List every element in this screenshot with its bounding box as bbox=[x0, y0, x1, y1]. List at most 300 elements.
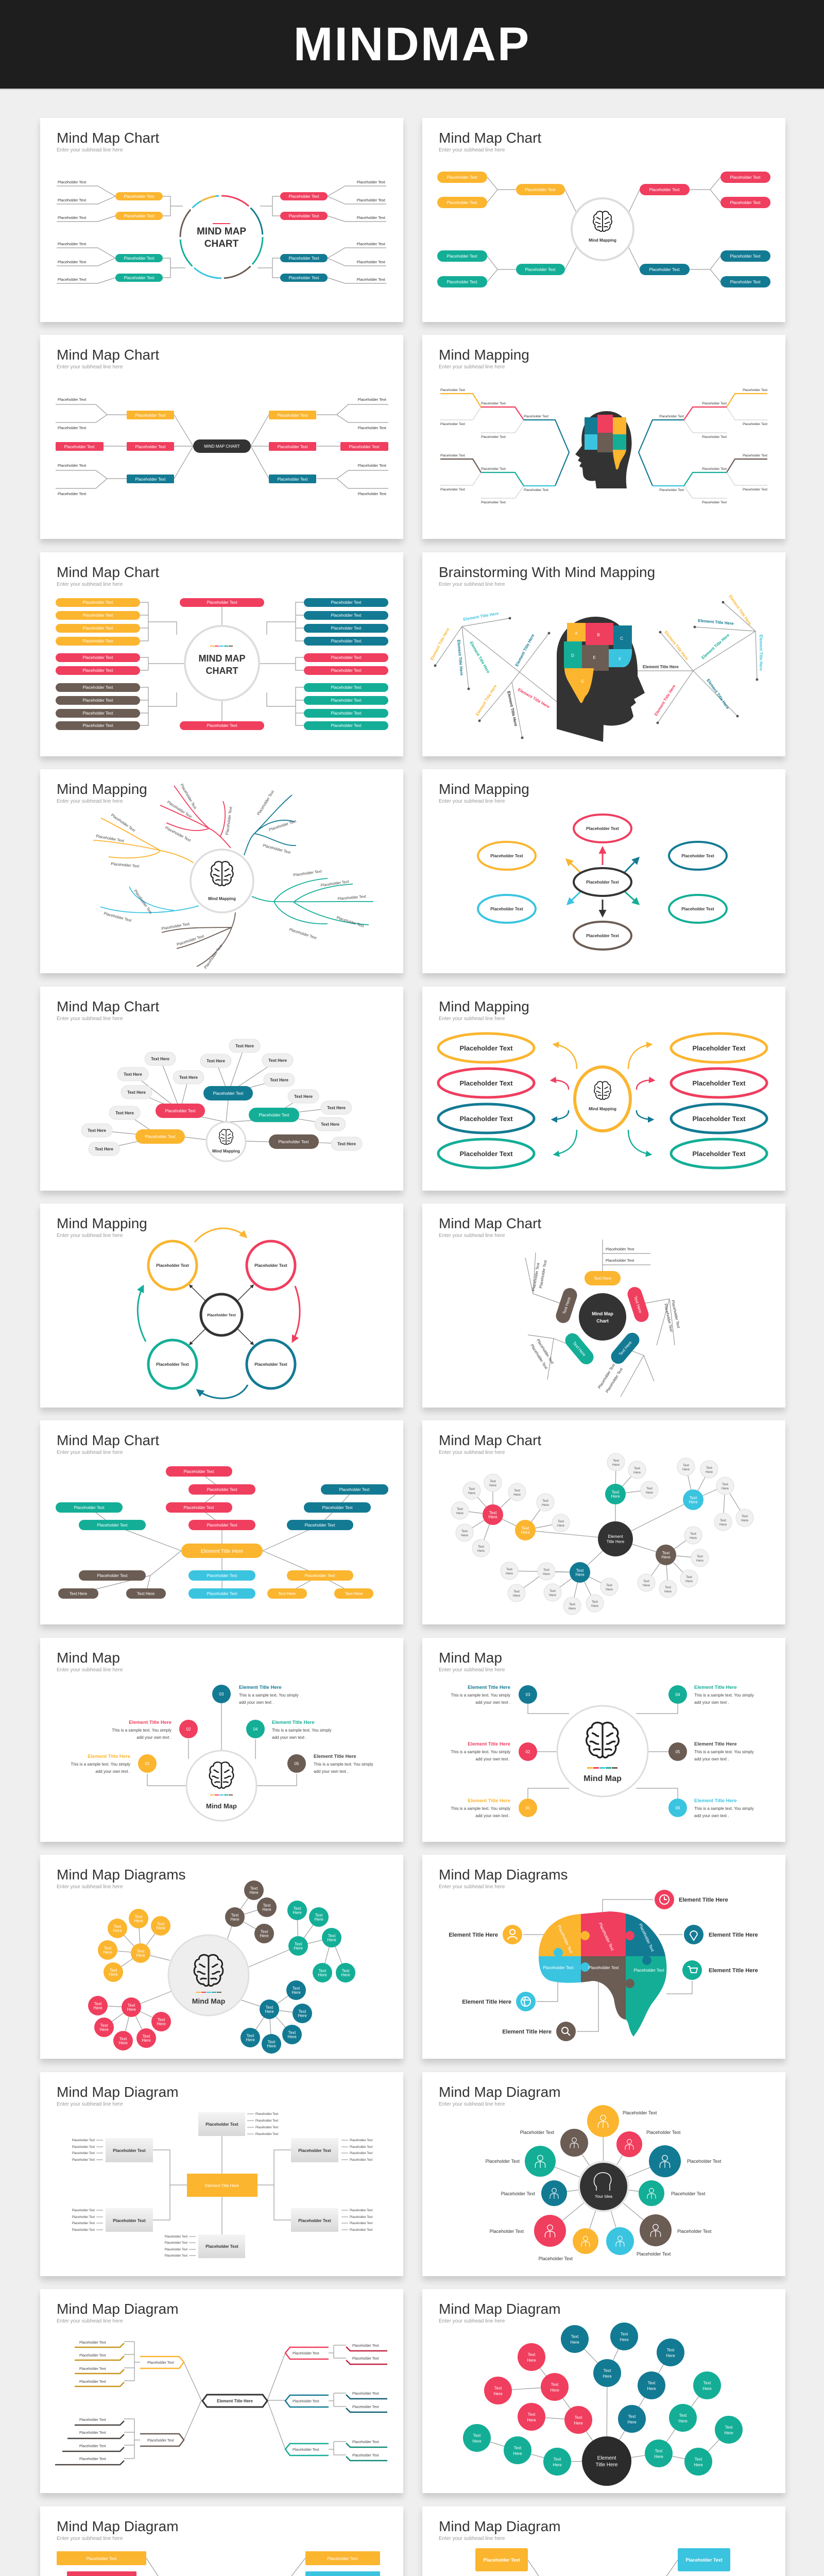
panel: slide 8 mind mapping brush ellipses: Placeholder Text bbox=[490, 854, 523, 858]
panel: slide 6 brainstorming with mind mapping: Element Title Here bbox=[728, 594, 752, 626]
panel: slide 15 mind map five numbered: add your own text . bbox=[239, 1700, 274, 1705]
panel: slide 19 mind map diagram boxes: Placeholder Text bbox=[255, 2113, 279, 2116]
panel: slide 7 mind mapping organic branches: Mind Mapping bbox=[208, 896, 236, 901]
panel: slide 17 mind map diagrams clusters: Here bbox=[260, 1934, 269, 1938]
panel: slide 12 mind map chart rotated pills: Mind Map bbox=[592, 1311, 613, 1316]
panel: slide 5 mind map chart many pills: Placeholder Text bbox=[331, 600, 362, 605]
panel: slide 16 mind map six numbered: 02 bbox=[526, 1750, 530, 1754]
panel: slide 14 mind map chart network: Here bbox=[633, 1471, 641, 1475]
panel: slide 11 mind mapping cycle: Placeholder Text bbox=[207, 1314, 236, 1317]
panel: slide 2 mind map chart brain pills: Placeholder Text bbox=[730, 175, 761, 180]
panel: slide 14 mind map chart network: Here bbox=[549, 1594, 556, 1597]
panel: slide 13 mind map chart hierarchy: Placeholder Text bbox=[207, 1523, 237, 1528]
panel: slide 14 mind map chart network: Here bbox=[682, 1468, 690, 1471]
panel: slide 22 mind map diagram tree circles: Text bbox=[648, 2381, 656, 2385]
panel: slide 22 mind map diagram tree circles: Here bbox=[666, 2353, 675, 2358]
panel: slide 17 mind map diagrams clusters: Text bbox=[299, 2009, 306, 2014]
panel: slide 17 mind map diagrams clusters: Text bbox=[250, 1886, 258, 1891]
panel: slide 16 mind map six numbered: Enter your subhead line here bbox=[439, 1667, 505, 1673]
panel: slide 17 mind map diagrams clusters: Text bbox=[119, 2037, 127, 2041]
panel: slide 21 mind map diagram hexagons: Placeholder Text bbox=[352, 2344, 379, 2348]
panel: slide 16 mind map six numbered: add your own text . bbox=[475, 1814, 510, 1818]
panel: slide 13 mind map chart hierarchy: Enter your subhead line here bbox=[57, 1450, 123, 1455]
panel: slide 15 mind map five numbered: Element Title Here bbox=[88, 1754, 130, 1759]
panel: slide 17 mind map diagrams clusters: Text bbox=[94, 2002, 102, 2006]
panel: slide 13 mind map chart hierarchy: Placeholder Text bbox=[339, 1487, 370, 1492]
panel: slide 16 mind map six numbered: This is a sample text. You simply bbox=[451, 1693, 510, 1698]
panel: slide 7 mind mapping organic branches: Placeholder Text bbox=[337, 894, 367, 901]
panel: slide 22 mind map diagram tree circles: Here bbox=[570, 2340, 579, 2345]
panel: slide 22 mind map diagram tree circles bbox=[422, 2289, 785, 2493]
panel: slide 22 mind map diagram tree circles: Text bbox=[554, 2457, 561, 2462]
panel: slide 22 mind map diagram tree circles: Here bbox=[472, 2439, 482, 2444]
panel: slide 17 mind map diagrams clusters: Text bbox=[288, 2030, 296, 2035]
panel: slide 12 mind map chart rotated pills: Chart bbox=[596, 1318, 609, 1324]
panel: slide 14 mind map chart network: Text bbox=[461, 1530, 468, 1533]
panel: slide 12 mind map chart rotated pills: Text Here bbox=[594, 1276, 612, 1281]
panel: slide 20 mind map diagram people: Enter your subhead line here bbox=[439, 2102, 505, 2107]
panel: slide 14 mind map chart network: Here bbox=[611, 1494, 620, 1499]
panel: slide 17 mind map diagrams clusters: Here bbox=[291, 1990, 301, 1995]
title: MINDMAP bbox=[294, 18, 530, 71]
panel: slide 19 mind map diagram boxes: Placeholder Text bbox=[72, 2152, 95, 2155]
panel: slide 17 mind map diagrams clusters: Text bbox=[247, 2033, 254, 2038]
panel: slide 15 mind map five numbered: Enter your subhead line here bbox=[57, 1667, 123, 1673]
panel: slide 4 mind mapping head: Placeholder Text bbox=[524, 415, 548, 418]
icon: head with puzzle brain: D bbox=[571, 653, 574, 658]
panel: slide 16 mind map six numbered: 06 bbox=[676, 1806, 680, 1810]
panel: slide 16 mind map six numbered: add your own text . bbox=[475, 1757, 510, 1761]
panel: slide 14 mind map chart network bbox=[422, 1420, 785, 1624]
panel: slide 21 mind map diagram hexagons: Placeholder Text bbox=[79, 2418, 106, 2422]
panel: slide 17 mind map diagrams clusters: Text bbox=[294, 1906, 301, 1911]
panel: slide 12 mind map chart rotated pills: Enter your subhead line here bbox=[439, 1233, 505, 1239]
panel: slide 15 mind map five numbered: 01 bbox=[145, 1761, 150, 1766]
panel: slide 14 mind map chart network: Text bbox=[706, 1466, 712, 1470]
panel: slide 3 mind map chart dark pill: Placeholder Text bbox=[358, 463, 387, 468]
panel: slide 5 mind map chart many pills: Placeholder Text bbox=[331, 639, 362, 643]
panel: slide 1 mind map chart circle: Placeholder Text bbox=[58, 215, 87, 220]
panel: slide 2 mind map chart brain pills: Placeholder Text bbox=[649, 188, 680, 192]
panel: slide 17 mind map diagrams clusters: Text bbox=[110, 1968, 117, 1973]
panel: slide 10 mind mapping yellow center: Enter your subhead line here bbox=[439, 1016, 505, 1022]
panel: slide 19 mind map diagram boxes: Placeholder Text bbox=[72, 2209, 95, 2212]
panel: slide 13 mind map chart hierarchy: Placeholder Text bbox=[207, 1591, 237, 1596]
panel: slide 9 mind map chart tree: Text Here bbox=[327, 1106, 346, 1110]
panel: slide 20 mind map diagram people: Placeholder Text bbox=[646, 2130, 681, 2135]
panel: slide 1 mind map chart circle: Placeholder Text bbox=[288, 276, 319, 280]
panel: slide 10 mind mapping yellow center: Mind Mapping bbox=[439, 998, 529, 1014]
panel: slide 19 mind map diagram boxes: Element Title Here bbox=[205, 2183, 239, 2188]
panel: slide 17 mind map diagrams clusters: Here bbox=[134, 1919, 143, 1923]
panel: slide 15 mind map five numbered: add your own text . bbox=[314, 1769, 349, 1774]
panel: slide 17 mind map diagrams clusters: Here bbox=[99, 2027, 109, 2032]
panel: slide 14 mind map chart network: Here bbox=[477, 1549, 485, 1553]
panel: slide 6 brainstorming with mind mapping: Element Title Here bbox=[517, 687, 551, 709]
panel: slide 11 mind mapping cycle: Placeholder Text bbox=[254, 1263, 287, 1268]
panel: slide 11 mind mapping cycle: Mind Mapping bbox=[57, 1215, 147, 1231]
panel: slide 13 mind map chart hierarchy: Text Here bbox=[278, 1591, 296, 1596]
panel: slide 17 mind map diagrams clusters: Text bbox=[158, 2018, 165, 2022]
panel: slide 8 mind mapping brush ellipses: Placeholder Text bbox=[490, 907, 523, 911]
panel: slide 19 mind map diagram boxes: Placeholder Text bbox=[72, 2159, 95, 2162]
panel: slide 12 mind map chart rotated pills: Mind Map Chart bbox=[439, 1215, 541, 1231]
panel: slide 17 mind map diagrams clusters: Here bbox=[118, 2041, 128, 2045]
panel: slide 8 mind mapping brush ellipses: Placeholder Text bbox=[586, 880, 619, 885]
panel: slide 12 mind map chart rotated pills: Text Here bbox=[618, 1340, 633, 1357]
panel: slide 1 mind map chart circle: Placeholder Text bbox=[288, 194, 319, 199]
panel: slide 19 mind map diagram boxes: Placeholder Text bbox=[113, 2218, 146, 2223]
panel: slide 13 mind map chart hierarchy: Placeholder Text bbox=[74, 1505, 105, 1510]
panel: slide 14 mind map chart network: Text bbox=[720, 1519, 726, 1522]
panel: slide 9 mind map chart tree: Text Here bbox=[321, 1122, 339, 1127]
panel: slide 17 mind map diagrams clusters: Text bbox=[157, 1922, 165, 1926]
panel: slide 6 brainstorming with mind mapping: Element Title Here bbox=[759, 635, 763, 671]
panel: slide 4 mind mapping head: Placeholder Text bbox=[481, 435, 506, 439]
panel: slide 9 mind map chart tree: Text Here bbox=[179, 1075, 198, 1080]
panel: slide 24 mind map diagram square boxes: Placeholder Text bbox=[685, 2557, 723, 2563]
panel: slide 18 mind map diagrams puzzle brain: Placeholder Text bbox=[598, 1922, 615, 1952]
panel: slide 1 mind map chart circle: Mind Map Chart bbox=[57, 130, 159, 146]
panel: slide 14 mind map chart network: Text bbox=[550, 1589, 556, 1593]
panel: slide 13 mind map chart hierarchy: Text Here bbox=[70, 1591, 88, 1596]
panel: slide 19 mind map diagram boxes: Placeholder Text bbox=[255, 2126, 279, 2129]
panel: slide 22 mind map diagram tree circles: Here bbox=[620, 2337, 629, 2342]
panel: slide 14 mind map chart network: Text bbox=[634, 1467, 640, 1470]
panel: slide 19 mind map diagram boxes: Placeholder Text bbox=[72, 2222, 95, 2225]
panel: slide 6 brainstorming with mind mapping: Element Title Here bbox=[430, 627, 451, 661]
panel: slide 9 mind map chart tree: Text Here bbox=[95, 1147, 113, 1151]
panel: slide 18 mind map diagrams puzzle brain: Placeholder Text bbox=[638, 1923, 655, 1953]
panel: slide 14 mind map chart network: Here bbox=[543, 1572, 550, 1576]
panel: slide 15 mind map five numbered bbox=[40, 1638, 403, 1842]
panel: slide 23 mind map diagram colored boxes: Enter your subhead line here bbox=[57, 2536, 123, 2541]
panel: slide 12 mind map chart rotated pills: Text Here bbox=[633, 1295, 643, 1314]
panel: slide 22 mind map diagram tree circles: Text bbox=[571, 2334, 579, 2339]
panel: slide 17 mind map diagrams clusters: Text bbox=[263, 1903, 271, 1908]
panel: slide 17 mind map diagrams clusters: Text bbox=[266, 2005, 273, 2010]
panel: slide 14 mind map chart network: Text bbox=[478, 1545, 484, 1549]
panel: slide 7 mind mapping organic branches: Placeholder Text bbox=[110, 812, 136, 833]
panel: slide 17 mind map diagrams clusters: Text bbox=[104, 1946, 112, 1951]
icon: head with puzzle brain: G bbox=[581, 679, 584, 684]
panel: slide 17 mind map diagrams clusters: Here bbox=[142, 2038, 151, 2043]
panel: slide 1 mind map chart circle: Placeholder Text bbox=[357, 242, 386, 246]
panel: slide 10 mind mapping yellow center: Placeholder Text bbox=[692, 1079, 746, 1087]
panel: slide 2 mind map chart brain pills: Placeholder Text bbox=[525, 188, 556, 192]
panel: slide 16 mind map six numbered: This is a sample text. You simply bbox=[694, 1806, 754, 1811]
panel: slide 2 mind map chart brain pills: Enter your subhead line here bbox=[439, 147, 505, 153]
panel: slide 14 mind map chart network: Here bbox=[591, 1604, 598, 1608]
panel: slide 3 mind map chart dark pill: Placeholder Text bbox=[277, 413, 308, 418]
panel: slide 17 mind map diagrams clusters: Text bbox=[143, 2034, 150, 2039]
panel: slide 3 mind map chart dark pill: Placeholder Text bbox=[135, 477, 166, 482]
panel: slide 13 mind map chart hierarchy: Text Here bbox=[345, 1591, 363, 1596]
panel: slide 19 mind map diagram boxes: Placeholder Text bbox=[165, 2235, 187, 2239]
panel: slide 15 mind map five numbered: This is a sample text. You simply bbox=[112, 1728, 171, 1733]
panel: slide 22 mind map diagram tree circles: Text bbox=[551, 2382, 559, 2387]
panel: slide 7 mind mapping organic branches: Placeholder Text bbox=[203, 943, 224, 970]
panel: slide 15 mind map five numbered: 02 bbox=[186, 1727, 191, 1732]
panel: slide 19 mind map diagram boxes: Enter your subhead line here bbox=[57, 2102, 123, 2107]
panel: slide 6 brainstorming with mind mapping: Element Title Here bbox=[514, 633, 536, 667]
panel: slide 5 mind map chart many pills: Mind Map Chart bbox=[57, 564, 159, 580]
panel: slide 3 mind map chart dark pill: Placeholder Text bbox=[58, 492, 87, 496]
panel: slide 10 mind mapping yellow center: Placeholder Text bbox=[459, 1115, 513, 1123]
panel: slide 21 mind map diagram hexagons: Placeholder Text bbox=[79, 2445, 106, 2448]
panel: slide 15 mind map five numbered: 03 bbox=[219, 1692, 224, 1697]
panel: slide 7 mind mapping organic branches: Placeholder Text bbox=[268, 819, 297, 832]
panel: slide 19 mind map diagram boxes: Placeholder Text bbox=[350, 2152, 373, 2155]
panel: slide 8 mind mapping brush ellipses: Enter your subhead line here bbox=[439, 799, 505, 804]
panel: slide 6 brainstorming with mind mapping: Brainstorming With Mind Mapping bbox=[439, 564, 655, 580]
panel: slide 14 mind map chart network: Here bbox=[513, 1493, 521, 1497]
panel: slide 21 mind map diagram hexagons bbox=[40, 2289, 403, 2493]
panel: slide 13 mind map chart hierarchy: Placeholder Text bbox=[305, 1523, 335, 1528]
panel: slide 5 mind map chart many pills: Placeholder Text bbox=[82, 655, 113, 660]
panel: slide 12 mind map chart rotated pills: Placeholder Text bbox=[605, 1367, 624, 1394]
panel: slide 21 mind map diagram hexagons: Placeholder Text bbox=[352, 2405, 379, 2409]
panel: slide 21 mind map diagram hexagons: Placeholder Text bbox=[293, 2400, 319, 2403]
panel: slide 5 mind map chart many pills: Placeholder Text bbox=[82, 626, 113, 631]
panel: slide 1 mind map chart circle: Placeholder Text bbox=[124, 256, 154, 261]
panel: slide 14 mind map chart network: Here bbox=[661, 1555, 671, 1560]
panel: slide 2 mind map chart brain pills: Placeholder Text bbox=[447, 200, 477, 205]
panel: slide 5 mind map chart many pills bbox=[40, 552, 403, 756]
panel: slide 21 mind map diagram hexagons: Placeholder Text bbox=[79, 2341, 106, 2345]
panel: slide 14 mind map chart network: Here bbox=[685, 1580, 693, 1583]
panel: slide 14 mind map chart network: Here bbox=[643, 1584, 650, 1587]
panel: slide 4 mind mapping head: Placeholder Text bbox=[702, 402, 727, 405]
panel: slide 14 mind map chart network: Text bbox=[522, 1526, 529, 1531]
panel: slide 14 mind map chart network: Text bbox=[683, 1464, 689, 1467]
panel: slide 19 mind map diagram boxes: Placeholder Text bbox=[255, 2120, 279, 2123]
panel: slide 14 mind map chart network: Here bbox=[606, 1588, 613, 1591]
panel: slide 14 mind map chart network: Here bbox=[719, 1523, 727, 1527]
panel: slide 1 mind map chart circle: Placeholder Text bbox=[58, 198, 87, 202]
panel: slide 21 mind map diagram hexagons: Enter your subhead line here bbox=[57, 2318, 123, 2324]
panel: slide 19 mind map diagram boxes: Placeholder Text bbox=[298, 2218, 331, 2223]
panel: slide 18 mind map diagrams puzzle brain: Element Title Here bbox=[462, 1999, 511, 2005]
panel: slide 14 mind map chart network: Element bbox=[608, 1534, 623, 1539]
panel: slide 4 mind mapping head: Placeholder Text bbox=[702, 467, 727, 471]
panel: slide 19 mind map diagram boxes: Placeholder Text bbox=[165, 2248, 187, 2251]
panel: slide 4 mind mapping head: Placeholder Text bbox=[440, 454, 465, 457]
panel: slide 10 mind mapping yellow center bbox=[422, 987, 785, 1191]
panel: slide 4 mind mapping head: Placeholder Text bbox=[481, 501, 506, 504]
panel: slide 17 mind map diagrams clusters: Text bbox=[261, 1929, 268, 1934]
icon: head with puzzle brain: B bbox=[597, 633, 600, 637]
panel: slide 13 mind map chart hierarchy: Placeholder Text bbox=[322, 1505, 353, 1510]
panel: slide 14 mind map chart network: Text bbox=[514, 1489, 520, 1493]
panel: slide 22 mind map diagram tree circles: Here bbox=[513, 2451, 522, 2456]
panel: slide 22 mind map diagram tree circles: Here bbox=[678, 2419, 688, 2424]
panel: slide 21 mind map diagram hexagons: Placeholder Text bbox=[293, 2352, 319, 2355]
panel: slide 21 mind map diagram hexagons: Placeholder Text bbox=[79, 2367, 106, 2371]
panel: slide 7 mind mapping organic branches: Placeholder Text bbox=[256, 789, 275, 816]
panel: slide 14 mind map chart network: Enter your subhead line here bbox=[439, 1450, 505, 1455]
panel: slide 7 mind mapping organic branches: Placeholder Text bbox=[111, 861, 140, 869]
panel: slide 14 mind map chart network: Text bbox=[606, 1584, 612, 1587]
panel: slide 17 mind map diagrams clusters: Here bbox=[298, 2013, 307, 2018]
panel: slide 8 mind mapping brush ellipses: Placeholder Text bbox=[681, 907, 714, 911]
panel: slide 14 mind map chart network: Text bbox=[662, 1551, 670, 1555]
panel: slide 1 mind map chart circle: Placeholder Text bbox=[58, 277, 87, 282]
panel: slide 17 mind map diagrams clusters: Here bbox=[113, 1928, 122, 1933]
panel: slide 4 mind mapping head: Placeholder Text bbox=[743, 422, 767, 426]
panel: slide 17 mind map diagrams clusters: Text bbox=[319, 1969, 327, 1973]
panel: slide 23 mind map diagram colored boxes bbox=[40, 2506, 403, 2576]
panel: slide 6 brainstorming with mind mapping: Element Title Here bbox=[463, 611, 499, 622]
panel: slide 7 mind mapping organic branches: Placeholder Text bbox=[225, 806, 233, 835]
panel: slide 9 mind map chart tree: Text Here bbox=[115, 1111, 134, 1115]
panel: slide 6 brainstorming with mind mapping: Element Title Here bbox=[456, 639, 464, 676]
panel: slide 1 mind map chart circle: Placeholder Text bbox=[288, 214, 319, 218]
panel: slide 14 mind map chart network: Text bbox=[722, 1483, 728, 1486]
panel: slide 14 mind map chart network: Here bbox=[722, 1487, 729, 1490]
panel: slide 17 mind map diagrams clusters: Text bbox=[128, 2003, 135, 2008]
panel: slide 17 mind map diagrams clusters: Here bbox=[246, 2038, 255, 2042]
panel: slide 13 mind map chart hierarchy: Placeholder Text bbox=[97, 1523, 128, 1528]
panel: slide 22 mind map diagram tree circles: Element bbox=[597, 2455, 616, 2461]
panel: slide 3 mind map chart dark pill: Enter your subhead line here bbox=[57, 364, 123, 370]
panel: slide 4 mind mapping head bbox=[422, 335, 785, 539]
panel: slide 17 mind map diagrams clusters: Mind Map bbox=[192, 1997, 225, 2005]
panel: slide 5 mind map chart many pills: Placeholder Text bbox=[82, 685, 113, 690]
panel: slide 7 mind mapping organic branches: Placeholder Text bbox=[288, 927, 318, 940]
panel: slide 14 mind map chart network: Here bbox=[575, 1572, 585, 1577]
panel: slide 18 mind map diagrams puzzle brain: Placeholder Text bbox=[557, 1924, 574, 1954]
panel: slide 1 mind map chart circle: Placeholder Text bbox=[357, 198, 386, 202]
panel: slide 4 mind mapping head: Placeholder Text bbox=[481, 467, 506, 471]
panel: slide 20 mind map diagram people: Mind Map Diagram bbox=[439, 2084, 561, 2100]
panel: slide 8 mind mapping brush ellipses: Placeholder Text bbox=[681, 854, 714, 858]
panel: slide 5 mind map chart many pills: Placeholder Text bbox=[331, 626, 362, 631]
panel: slide 22 mind map diagram tree circles: Here bbox=[702, 2386, 712, 2391]
panel: slide 17 mind map diagrams clusters: Enter your subhead line here bbox=[57, 1884, 123, 1890]
panel: slide 6 brainstorming with mind mapping: Element Title Here bbox=[643, 665, 679, 669]
panel: slide 10 mind mapping yellow center: Mind Mapping bbox=[589, 1107, 616, 1111]
panel: slide 5 mind map chart many pills: Placeholder Text bbox=[331, 685, 362, 690]
panel: slide 14 mind map chart network: Text bbox=[469, 1487, 475, 1491]
panel: slide 20 mind map diagram people: Your Idea bbox=[595, 2194, 613, 2199]
panel: slide 21 mind map diagram hexagons: Placeholder Text bbox=[79, 2354, 106, 2358]
panel: slide 19 mind map diagram boxes: Placeholder Text bbox=[72, 2216, 95, 2219]
panel: slide 22 mind map diagram tree circles: Text bbox=[621, 2332, 628, 2336]
panel: slide 14 mind map chart network: Text bbox=[665, 1586, 671, 1589]
panel: slide 14 mind map chart network: Text bbox=[457, 1507, 463, 1511]
panel: slide 6 brainstorming with mind mapping: Element Title Here bbox=[475, 684, 498, 717]
panel: slide 1 mind map chart circle: Enter your subhead line here bbox=[57, 147, 123, 153]
panel: slide 18 mind map diagrams puzzle brain: Element Title Here bbox=[679, 1897, 728, 1903]
panel: slide 21 mind map diagram hexagons: Mind Map Diagram bbox=[57, 2301, 179, 2317]
panel: slide 1 mind map chart circle: Placeholder Text bbox=[357, 180, 386, 184]
panel: slide 7 mind mapping organic branches: Placeholder Text bbox=[96, 834, 125, 843]
panel: slide 17 mind map diagrams clusters: Here bbox=[327, 1938, 336, 1942]
panel: slide 9 mind map chart tree: Enter your subhead line here bbox=[57, 1016, 123, 1022]
panel: slide 19 mind map diagram boxes: Placeholder Text bbox=[165, 2255, 187, 2258]
panel: slide 22 mind map diagram tree circles: Text bbox=[604, 2368, 611, 2373]
panel: slide 14 mind map chart network: Here bbox=[488, 1515, 497, 1519]
panel: slide 14 mind map chart network: Here bbox=[521, 1530, 530, 1535]
panel: slide 17 mind map diagrams clusters: Text bbox=[135, 1914, 143, 1919]
panel: slide 22 mind map diagram tree circles: Text bbox=[703, 2381, 711, 2385]
panel: slide 22 mind map diagram tree circles: Here bbox=[550, 2388, 559, 2393]
panel: slide 15 mind map five numbered: This is a sample text. You simply bbox=[272, 1728, 332, 1733]
panel: slide 22 mind map diagram tree circles: Text bbox=[473, 2433, 481, 2438]
panel: slide 3 mind map chart dark pill: Placeholder Text bbox=[358, 397, 387, 402]
panel: slide 7 mind mapping organic branches: Placeholder Text bbox=[164, 825, 192, 843]
panel: slide 15 mind map five numbered: 05 bbox=[295, 1761, 299, 1766]
panel: slide 9 mind map chart tree: Text Here bbox=[337, 1142, 356, 1146]
panel: slide 5 mind map chart many pills: Placeholder Text bbox=[331, 723, 362, 728]
panel: slide 12 mind map chart rotated pills: Placeholder Text bbox=[529, 1343, 549, 1370]
panel: slide 3 mind map chart dark pill: Placeholder Text bbox=[135, 445, 166, 449]
panel: slide 8 mind mapping brush ellipses: Mind Mapping bbox=[439, 781, 529, 797]
panel: slide 20 mind map diagram people: Placeholder Text bbox=[520, 2130, 554, 2135]
panel: slide 14 mind map chart network: Text bbox=[513, 1590, 520, 1594]
panel: slide 6 brainstorming with mind mapping: Element Title Here bbox=[506, 691, 518, 727]
panel: slide 22 mind map diagram tree circles: Text bbox=[528, 2412, 536, 2417]
panel: slide 14 mind map chart network: Text bbox=[543, 1568, 550, 1572]
panel: slide 15 mind map five numbered: Element Title Here bbox=[272, 1720, 315, 1725]
panel: slide 16 mind map six numbered: Element Title Here bbox=[694, 1741, 737, 1747]
panel: slide 21 mind map diagram hexagons: Placeholder Text bbox=[352, 2357, 379, 2361]
panel: slide 12 mind map chart rotated pills: Text Here bbox=[562, 1296, 572, 1315]
panel: slide 6 brainstorming with mind mapping: Element Title Here bbox=[663, 630, 690, 662]
panel: slide 24 mind map diagram square boxes bbox=[422, 2506, 785, 2576]
panel: slide 2 mind map chart brain pills: Placeholder Text bbox=[447, 280, 477, 284]
panel: slide 12 mind map chart rotated pills: Placeholder Text bbox=[671, 1300, 681, 1329]
panel: slide 11 mind mapping cycle: Enter your subhead line here bbox=[57, 1233, 123, 1239]
panel: slide 19 mind map diagram boxes: Placeholder Text bbox=[350, 2159, 373, 2162]
panel: slide 19 mind map diagram boxes: Placeholder Text bbox=[350, 2229, 373, 2232]
panel: slide 5 mind map chart many pills: Placeholder Text bbox=[331, 613, 362, 618]
panel: slide 16 mind map six numbered: This is a sample text. You simply bbox=[694, 1693, 754, 1698]
panel: slide 14 mind map chart network: Here bbox=[646, 1491, 653, 1495]
icon: head with puzzle brain: F bbox=[619, 657, 622, 662]
panel: slide 9 mind map chart tree: Text Here bbox=[294, 1094, 313, 1099]
panel: slide 16 mind map six numbered: This is a sample text. You simply bbox=[694, 1750, 754, 1754]
panel: slide 9 mind map chart tree: Text Here bbox=[268, 1058, 287, 1063]
panel: slide 5 mind map chart many pills: Placeholder Text bbox=[82, 698, 113, 703]
panel: slide 1 mind map chart circle: Placeholder Text bbox=[124, 194, 154, 199]
panel: slide 19 mind map diagram boxes: Placeholder Text bbox=[113, 2148, 146, 2153]
panel: slide 10 mind mapping yellow center: Placeholder Text bbox=[459, 1044, 513, 1052]
icon: head with puzzle brain bbox=[557, 617, 645, 742]
panel: slide 17 mind map diagrams clusters: Here bbox=[314, 1917, 323, 1922]
panel: slide 17 mind map diagrams clusters: Here bbox=[109, 1972, 118, 1977]
panel: slide 14 mind map chart network: Text bbox=[489, 1511, 497, 1515]
panel: slide 7 mind mapping organic branches: Placeholder Text bbox=[179, 783, 198, 810]
panel: slide 14 mind map chart network: Text bbox=[690, 1496, 697, 1500]
panel: slide 3 mind map chart dark pill: Placeholder Text bbox=[58, 463, 87, 468]
panel: slide 14 mind map chart network: Text bbox=[612, 1490, 620, 1495]
panel: slide 21 mind map diagram hexagons: Placeholder Text bbox=[352, 2441, 379, 2444]
panel: slide 19 mind map diagram boxes: Placeholder Text bbox=[350, 2222, 373, 2225]
panel: slide 16 mind map six numbered: add your own text . bbox=[475, 1700, 510, 1705]
panel: slide 6 brainstorming with mind mapping: Enter your subhead line here bbox=[439, 582, 505, 587]
panel: slide 17 mind map diagrams clusters: Text bbox=[328, 1934, 336, 1938]
panel: slide 19 mind map diagram boxes: Placeholder Text bbox=[350, 2139, 373, 2142]
center circle bbox=[163, 179, 280, 295]
panel: slide 4 mind mapping head: Placeholder Text bbox=[743, 488, 767, 492]
panel: slide 4 mind mapping head: Placeholder Text bbox=[440, 488, 465, 492]
panel: slide 4 mind mapping head: Placeholder Text bbox=[702, 501, 727, 504]
panel: slide 7 mind mapping organic branches: Placeholder Text bbox=[262, 843, 291, 855]
header bbox=[0, 0, 824, 90]
panel: slide 17 mind map diagrams clusters: Here bbox=[293, 1910, 302, 1915]
